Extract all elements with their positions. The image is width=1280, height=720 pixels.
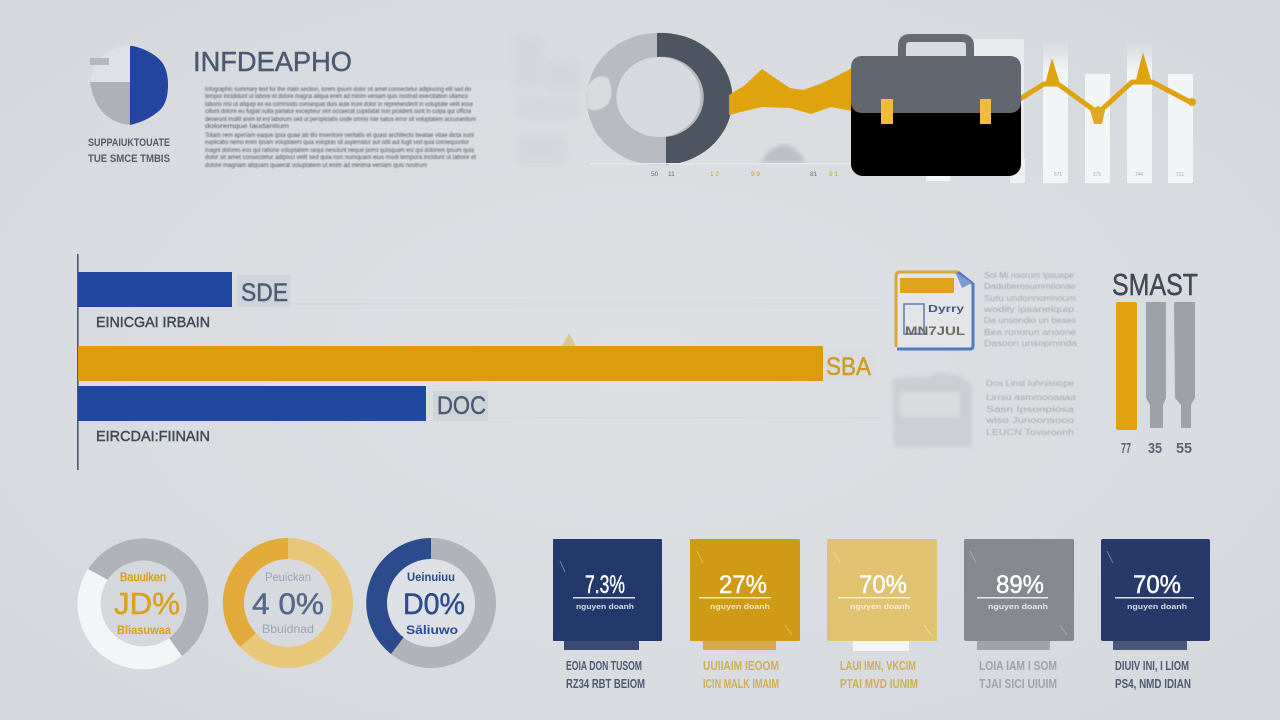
stat card four	[964, 539, 1074, 650]
chart axis ticks: 50	[651, 171, 659, 178]
bar: yellow	[78, 346, 874, 381]
bar label one: EINICGAI IRBAIN	[96, 314, 210, 331]
intro text block: doloremque laudantium	[205, 123, 289, 130]
document icon	[895, 271, 974, 350]
donut one	[78, 538, 208, 669]
donut two: Peuickan	[265, 570, 311, 584]
chart axis ticks: 9 1	[829, 171, 838, 178]
stat card three	[827, 539, 937, 651]
folder text: Sasn Ipsonpiosa	[986, 405, 1075, 414]
donut three: Sāliuwo	[406, 623, 458, 637]
document text: Daduberosummtionae	[984, 282, 1077, 291]
document text: Sutu undonnomnoum	[984, 294, 1076, 303]
bar: first blue	[78, 272, 290, 307]
stat card five label	[1115, 658, 1191, 691]
donut three: D0%	[403, 588, 465, 621]
stat card two label	[703, 658, 779, 691]
donut two	[223, 538, 353, 668]
donut one: Bauuiken	[120, 570, 166, 584]
chart axis ticks: 81	[810, 171, 818, 178]
stat card five: nguyen doanh	[1127, 604, 1187, 611]
stat card one: nguyen doanh	[576, 604, 634, 611]
stat card four label: LOIA IAM I SOM	[979, 658, 1057, 673]
stat card one label	[566, 658, 645, 691]
yellow trend line	[1020, 52, 1196, 124]
SMAST column bars	[1116, 302, 1195, 430]
stat card one label: RZ34 RBT BEIOM	[566, 676, 645, 691]
donut one: JD%	[114, 586, 180, 621]
intro text block: tempor incididunt ut labore et dolore magna aliqua enim ad minim veniam quis nostrud exercitation ullamco	[205, 93, 468, 100]
folder text	[985, 379, 1077, 437]
intro text block: explicabo nemo enim ipsam voluptatem quia voluptas sit aspernatur aut odit aut fugit sed quia consequuntur	[205, 139, 470, 146]
logo caption	[88, 137, 170, 165]
SMAST column labels: 55	[1176, 440, 1192, 457]
stat card two: nguyen doanh	[710, 604, 770, 611]
chart axis ticks: 744	[1135, 172, 1143, 178]
document text: Sol Mi nsorum Ipsuape	[984, 271, 1075, 280]
chart axis ticks: 11	[668, 171, 675, 178]
stat card two: 27%	[719, 571, 767, 599]
donut two: 4 0%	[252, 588, 324, 621]
intro text block: deserunt mollit anim id est laborum sed ut perspiciatis unde omnis iste natus error sit voluptatem accusantium	[205, 116, 476, 123]
stat card three: 70%	[859, 571, 907, 599]
document icon: MN7JUL	[905, 324, 965, 338]
folder text: Lirrsu asmmooaaaa	[986, 393, 1077, 402]
intro text block: dolor sit amet consectetur adipisci velit sed quia non numquam eius modi tempora incidunt ut labore et	[205, 154, 476, 161]
bar: second blue: DOC	[437, 392, 486, 420]
faded background panel	[516, 36, 580, 165]
bar marker	[562, 333, 576, 346]
donut three	[366, 538, 496, 668]
document text: wodily ipsaneiquip	[983, 305, 1075, 314]
bar: second blue	[78, 386, 488, 421]
stat card three label: PTAI MVD IUNIM	[840, 676, 918, 691]
stat card three: nguyen doanh	[850, 604, 910, 611]
stat card two label: ICIN MALK IMAIM	[703, 676, 779, 691]
logo pie icon	[90, 46, 168, 125]
briefcase icon	[851, 38, 1021, 176]
intro text block: cillum dolore eu fugiat nulla pariatur excepteur sint occaecat cupidatat non proident sunt in culpa qui officia	[205, 108, 471, 115]
intro text block: laboris nisi ut aliquip ex ea commodo consequat duis aute irure dolor in reprehenderit in voluptate velit esse	[205, 101, 473, 108]
bar chart grid	[290, 304, 880, 418]
document icon: Dyrry	[928, 304, 965, 315]
SMAST column labels: 77	[1121, 440, 1131, 457]
folder text: wiso Junoonsooo	[985, 416, 1075, 425]
stat card three label	[840, 658, 918, 691]
document text: Bea ronorun anoone	[984, 328, 1077, 337]
bar label two: EIRCDAI:FIINAIN	[96, 428, 210, 445]
document text	[983, 271, 1078, 348]
stat card two	[690, 539, 800, 650]
stat card four: nguyen doanh	[988, 604, 1048, 611]
chart axis ticks: 375	[1093, 172, 1101, 178]
stat card four: 89%	[996, 571, 1044, 599]
stat card five label: PS4, NMD IDIAN	[1115, 676, 1191, 691]
SMAST column labels	[1121, 440, 1192, 457]
intro text block: dolore magnam aliquam quaerat voluptatem ut enim ad minima veniam quis nostrum	[205, 162, 427, 169]
chart axis ticks: 571	[1054, 172, 1062, 178]
stat card five: 70%	[1133, 571, 1181, 599]
donut one: Bliasuwaa	[117, 623, 171, 637]
white column chart bars	[926, 39, 1193, 183]
stat card four label: TJAI SICI UIUIM	[979, 676, 1057, 691]
stat card five	[1101, 539, 1210, 650]
faded hill	[760, 145, 806, 163]
donut two: Bbuidnad	[262, 622, 314, 636]
stat card two label: UUIIAIM IEOOM	[703, 658, 779, 673]
document text: Da unsondio un beses	[984, 316, 1076, 325]
blurred folder icon	[892, 372, 972, 447]
logo caption: SUPPAIUKTOUATE	[88, 137, 170, 149]
stat card one: 7.3%	[585, 571, 625, 599]
SMAST heading: SMAST	[1112, 267, 1198, 302]
chart axis ticks	[590, 163, 1184, 178]
intro text block: magni dolores eos qui ratione voluptatem sequi nesciunt neque porro quisquam est qui dolorem ipsum quia	[205, 147, 474, 154]
chart axis ticks: 721	[1176, 172, 1184, 178]
SMAST column labels: 35	[1148, 440, 1162, 457]
stat card five label: DIUIV INI, I LIOM	[1115, 658, 1189, 673]
donut chart	[586, 33, 733, 165]
yellow area line	[729, 68, 852, 115]
folder text: Dos Linsl Iuhnisoope	[986, 379, 1075, 388]
bar chart axis	[77, 254, 79, 470]
donut three: Ueinuiuu	[407, 570, 455, 584]
bar: first blue: SDE	[241, 279, 288, 307]
bar: yellow: SBA	[826, 353, 871, 381]
chart axis ticks: 9 9	[751, 171, 760, 178]
stat card three label: LAUI IMN, VKCIM	[840, 658, 916, 673]
stat card one label: EOIA DON TUSOM	[566, 658, 642, 673]
intro text block: Totam rem aperiam eaque ipsa quae ab illo inventore veritatis et quasi architecto beatae vitae dicta sunt	[205, 132, 474, 139]
logo caption: TUE SMCE TMBIS	[88, 153, 170, 165]
folder text: LEUCN Tovoroonh	[986, 428, 1074, 437]
document text: Dasoon unsopminda	[984, 339, 1078, 348]
title: INFDEAPHO	[193, 46, 352, 77]
intro text block	[205, 86, 476, 169]
intro text block: Infographic summary text for the main section, lorem ipsum dolor sit amet consectetur adipiscing elit sed do	[205, 86, 471, 93]
stat card one	[553, 539, 662, 650]
chart axis ticks: 1 2	[710, 171, 719, 178]
stat card four label	[979, 658, 1057, 691]
